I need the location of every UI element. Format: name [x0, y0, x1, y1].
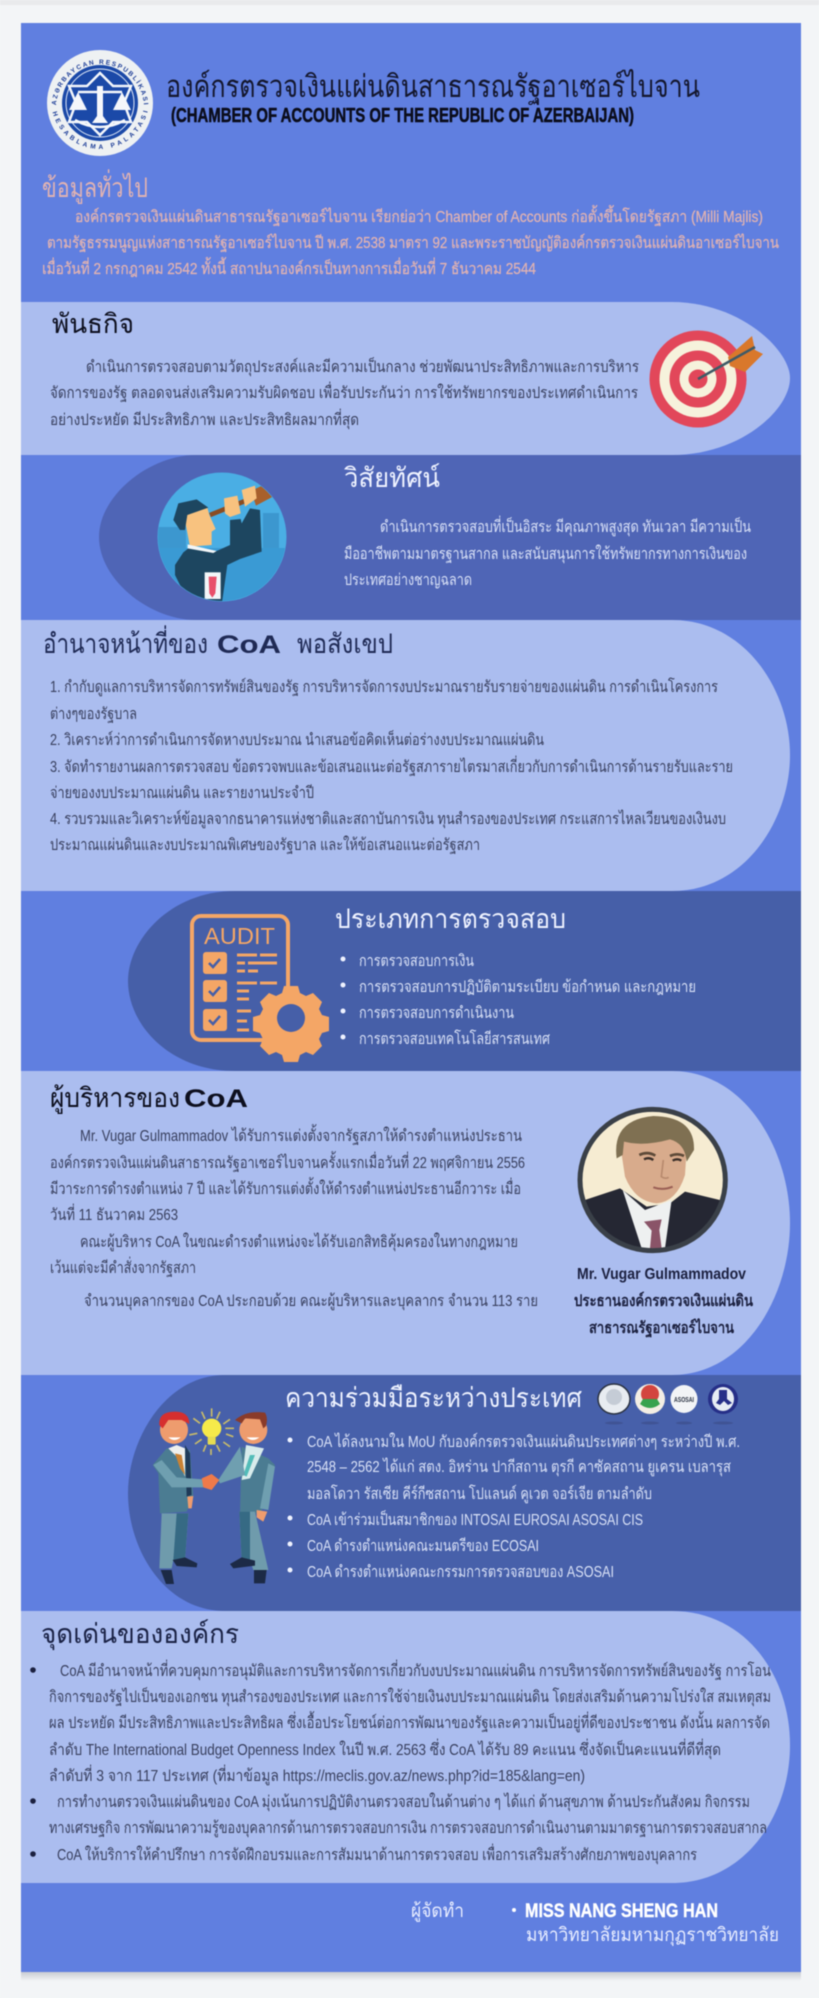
list: cooperation activities: CoA ดำรงตำแหน่งคณะมนตรีของ ECOSAI	[307, 1537, 539, 1555]
heading: mission: พันธกิจ	[52, 309, 134, 339]
panel: CoA executives	[21, 1071, 790, 1375]
figure: left businessman	[153, 1412, 203, 1584]
logo: ASOSAI: ASOSAI	[674, 1397, 694, 1404]
caption: portrait name and position	[574, 1266, 753, 1338]
image: portrait of Mr. Vugar Gulmammadov	[580, 1109, 727, 1257]
panel: organisation highlights	[21, 1611, 790, 1883]
heading: general information: ข้อมูลทั่วไป	[42, 169, 148, 204]
section: general information	[42, 169, 779, 278]
heading: CoA executives: CoA	[184, 1085, 248, 1113]
text block: executive biography: คณะผู้บริหาร CoA ในขณะดำรงตำแหน่งจะได้รับเอกสิทธิคุ้มครองในทางกฎหมาย	[80, 1232, 518, 1252]
heading: vision: วิสัยทัศน์	[344, 462, 440, 493]
title English: (CHAMBER OF ACCOUNTS OF THE REPUBLIC OF AZERBAIJAN)	[171, 105, 634, 127]
figure: right businessman	[218, 1412, 275, 1583]
icon: light bulb	[189, 1408, 234, 1455]
illustration: two businessmen shaking hands with light bulb	[153, 1408, 275, 1584]
text block: executive biography	[50, 1124, 538, 1311]
panel: audit types	[128, 891, 801, 1071]
list: cooperation activities: มอลโดวา รัสเซีย คีร์กีซสถาน โปแลนด์ คูเวต จอร์เจีย ตามลำดับ	[307, 1484, 652, 1504]
list: highlights	[30, 1659, 771, 1865]
text block: executive biography: จำนวนบุคลากรของ CoA ประกอบด้วย คณะผู้บริหารและบุคลากร จำนวน 113 ราย	[84, 1292, 538, 1311]
heading: organisation highlights: จุดเด่นขององค์กร	[41, 1618, 239, 1651]
text block: mission: ดำเนินการตรวจสอบตามวัตถุประสงค์และมีความเป็นกลาง ช่วยพัฒนาประสิทธิภาพและการบริหาร	[86, 356, 639, 377]
list: audit types: การตรวจสอบเทคโนโลยีสารสนเทศ	[359, 1029, 550, 1048]
text block: duties list	[50, 677, 733, 854]
list: audit types: การตรวจสอบการเงิน	[359, 953, 474, 970]
text block: duties list: จ่ายของงบประมาณแผ่นดิน และรายงานประจำปี	[50, 784, 314, 802]
illustration: businessman with telescope	[157, 472, 287, 602]
icon: audit clipboard with gear	[192, 916, 329, 1062]
text block: vision	[344, 515, 751, 589]
caption: portrait name and position: สาธารณรัฐอาเซอร์ไบจาน	[589, 1318, 734, 1338]
author university: มหาวิทยาลัยมหามกุฏราชวิทยาลัย	[526, 1925, 779, 1947]
heading: powers and duties	[43, 625, 393, 659]
label: prepared by: ผู้จัดทำ	[411, 1901, 464, 1922]
icon: target with arrow	[650, 330, 763, 428]
list: cooperation activities: CoA เข้าร่วมเป็นสมาชิกของ INTOSAI EUROSAI ASOSAI CIS	[307, 1509, 643, 1529]
list: cooperation activities: CoA ดำรงตำแหน่งคณะกรรมการตรวจสอบของ ASOSAI	[307, 1564, 614, 1581]
heading: audit types: ประเภทการตรวจสอบ	[335, 904, 566, 934]
text block: vision: ประเทศอย่างชาญฉลาด	[344, 572, 472, 589]
list: highlights: ลำดับที่ 3 จาก 117 ประเทศ (ที่มาข้อมูล https://meclis.gov.az/news.php?id=185&lang=en)	[49, 1764, 585, 1786]
heading: powers and duties: CoA	[217, 631, 281, 659]
text block: executive biography: มีวาระการดำรงตำแหน่ง 7 ปี และได้รับการแต่งตั้งให้ดำรงตำแหน่งประธานอีกวาระ เมื่อ	[50, 1177, 521, 1198]
panel: mission	[21, 302, 790, 455]
panel: international cooperation	[128, 1375, 801, 1611]
text block: duties list: ประมาณแผ่นดินและงบประมาณพิเศษของรัฐบาล และให้ข้อเสนอแนะต่อรัฐสภา	[50, 835, 480, 854]
icons: partner organisation logos	[598, 1384, 738, 1424]
heading: powers and duties: อำนาจหน้าที่ของ	[43, 625, 208, 659]
text block: executive biography: วันที่ 11 ธันวาคม 2563	[50, 1203, 178, 1224]
text block: mission: อย่างประหยัด มีประสิทธิภาพ และประสิทธิผลมากที่สุด	[50, 408, 359, 430]
title Thai: องค์กรตรวจเงินแผ่นดินสาธารณรัฐอาเซอร์ไบจาน	[166, 69, 700, 105]
list: cooperation activities: 2548 – 2562 ได้แก่ สตง. อิหร่าน ปากีสถาน ตุรกี คาซัคสถาน ยูเครน เบลารุส	[307, 1457, 731, 1477]
list: cooperation activities	[288, 1432, 740, 1581]
logo: CIS	[708, 1384, 738, 1424]
list: audit types: การตรวจสอบการปฏิบัติตามระเบียบ ข้อกำหนด และกฎหมาย	[359, 978, 696, 996]
icon: Chamber of Accounts seal: AZƏRBAYCAN RESPUBLİKASI	[51, 58, 149, 106]
text block: mission: จัดการของรัฐ ตลอดจนส่งเสริมความรับผิดชอบ เพื่อรับประกันว่า การใช้ทรัพยากรของประเทศดำเนินการ	[50, 381, 638, 402]
footer: author credit	[411, 1901, 779, 1947]
heading: CoA executives	[50, 1083, 248, 1114]
logo: INTOSAI	[598, 1384, 630, 1424]
author name: MISS NANG SHENG HAN	[525, 1901, 718, 1922]
icon: handshake hands	[202, 1474, 219, 1490]
text block: general information: เมื่อวันที่ 2 กรกฎาคม 2542 ทั้งนี้ สถาปนาองค์กรเป็นทางการเมื่อวันที่ 7 ธันวาคม 2544	[42, 257, 536, 278]
text block: duties list: ต่างๆของรัฐบาล	[50, 706, 137, 723]
heading: powers and duties: พอสังเขป	[297, 629, 393, 659]
text block: general information	[42, 205, 779, 278]
heading: international cooperation: ความร่วมมือระหว่างประเทศ	[285, 1383, 582, 1413]
panel: vision	[99, 455, 801, 620]
logo: EUROSAI	[635, 1384, 665, 1424]
heading: CoA executives: ผู้บริหารของ	[50, 1083, 180, 1114]
text block: executive biography: องค์กรตรวจเงินแผ่นดินสาธารณรัฐอาเซอร์ไบจานครั้งแรกเมื่อวันที่ 22 พฤศจิกายน 2556	[50, 1151, 525, 1172]
list: audit types	[340, 953, 696, 1048]
list: audit types: การตรวจสอบการดำเนินงาน	[359, 1005, 514, 1022]
icon: Chamber of Accounts seal: HESABLAMA PALATASI	[52, 110, 148, 150]
text block: executive biography: Mr. Vugar Gulmammadov ได้รับการแต่งตั้งจากรัฐสภาให้ดำรงตำแหน่งประธาน	[80, 1124, 522, 1145]
caption: portrait name and position: ประธานองค์กรตรวจเงินแผ่นดิน	[574, 1291, 753, 1310]
header: logo and title	[46, 49, 700, 157]
icon: audit clipboard with gear: AUDIT	[204, 923, 275, 949]
text block: mission	[50, 356, 639, 430]
caption: portrait name and position: Mr. Vugar Gulmammadov	[577, 1266, 746, 1283]
text block: duties list: 2. วิเคราะห์ว่าการดำเนินการจัดหางบประมาณ นำเสนอข้อคิดเห็นต่อร่างงบประมาณแผ่นดิน	[50, 729, 544, 749]
text block: executive biography: เว้นแต่จะมีคำสั่งจากรัฐสภา	[50, 1256, 196, 1277]
icon: Chamber of Accounts seal	[46, 49, 154, 157]
panel: powers and duties	[21, 620, 790, 891]
